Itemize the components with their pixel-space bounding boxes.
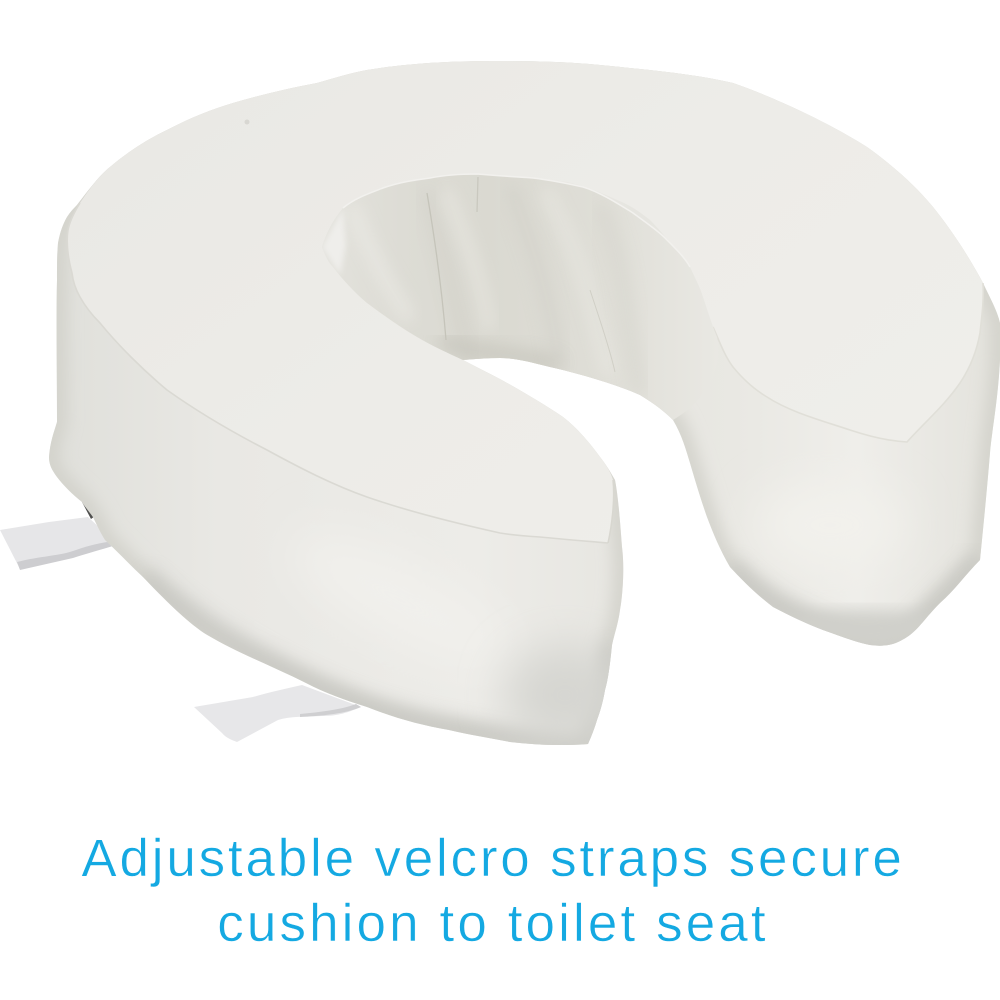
top surface seam left <box>67 203 608 543</box>
inner wall stitched top rim <box>343 174 690 267</box>
caption <box>81 829 905 953</box>
caption: Adjustable velcro straps secure <box>81 829 905 888</box>
cushion silhouette and side wall <box>49 61 1000 745</box>
top surface seam right <box>713 283 983 442</box>
cushion inner wall with pleats <box>322 174 718 420</box>
cushion top surface <box>67 61 983 543</box>
strap: bottom velcro <box>194 685 361 742</box>
front corner stitch <box>608 480 614 543</box>
strap: left velcro <box>0 517 116 570</box>
illustration: toilet seat cushion <box>0 61 1000 745</box>
strap bracket dark gap <box>82 500 95 519</box>
caption: cushion to toilet seat <box>217 894 769 953</box>
